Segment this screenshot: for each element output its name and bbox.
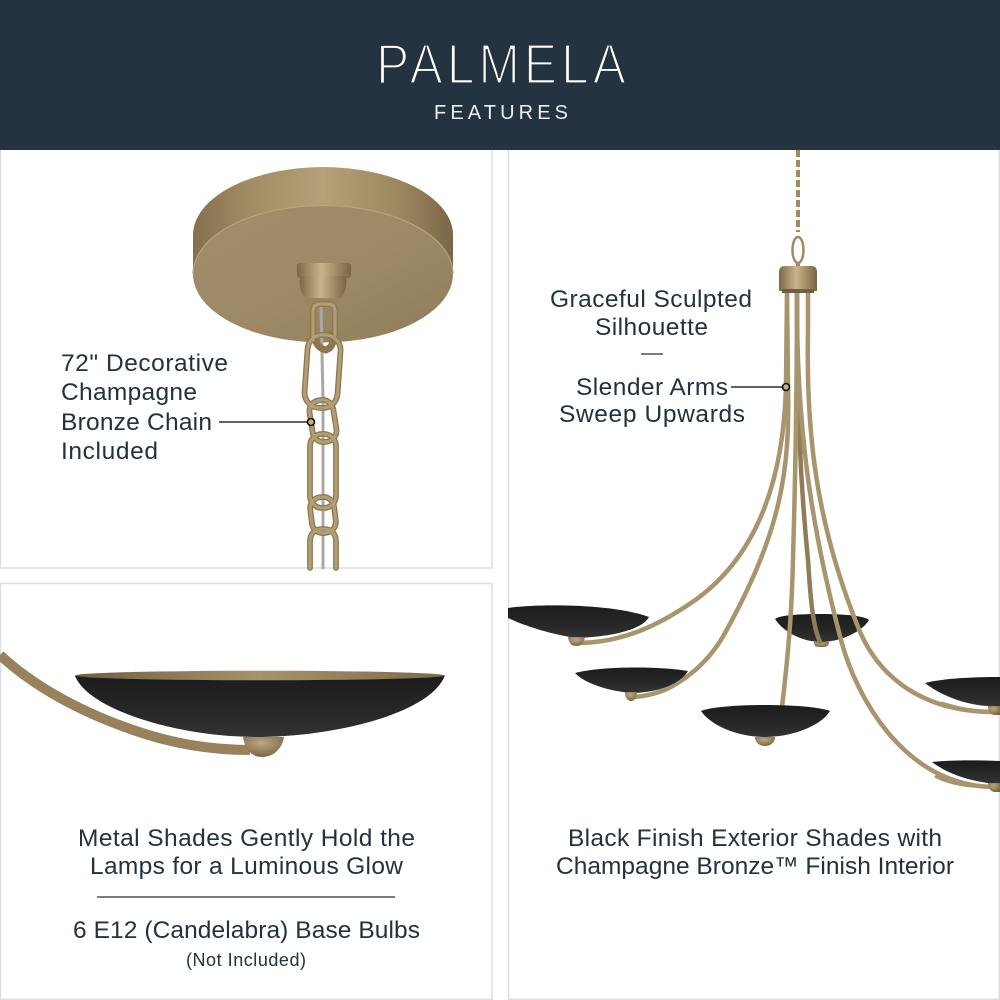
canopy <box>193 167 453 342</box>
callout: silhouette and arms: Silhouette <box>595 314 708 341</box>
callout: chain <box>61 350 314 465</box>
header band <box>0 0 1000 150</box>
shade right lower <box>932 760 1000 792</box>
ceiling cap <box>779 266 817 293</box>
back shade <box>775 614 869 647</box>
shade text: 6 E12 (Candelabra) Base Bulbs <box>73 917 420 944</box>
callout: chain: Bronze Chain <box>61 409 212 436</box>
shade text: (Not Included) <box>186 950 306 970</box>
callout: chain: Champagne <box>61 379 197 406</box>
finish text: Black Finish Exterior Shades with <box>568 825 942 852</box>
arm <box>0 655 250 750</box>
panel: chain detail <box>0 150 492 568</box>
finish text: Champagne Bronze™ Finish Interior <box>556 853 954 880</box>
callout: silhouette and arms: Graceful Sculpted <box>550 286 752 313</box>
callout: chain: 72" Decorative <box>61 350 228 377</box>
shade left <box>508 605 649 646</box>
shade text: Metal Shades Gently Hold the <box>78 825 415 852</box>
callout: silhouette and arms <box>550 286 790 428</box>
hanging chain <box>792 150 804 268</box>
panel: full chandelier <box>508 150 1000 999</box>
shade mid-left <box>575 667 692 701</box>
arms <box>580 292 995 787</box>
callout: chain: Included <box>61 438 158 465</box>
shade text: Lamps for a Luminous Glow <box>90 853 403 880</box>
shade text <box>73 825 420 970</box>
shade front <box>701 705 830 746</box>
large shade <box>75 671 445 757</box>
finish text <box>556 825 954 880</box>
callout: silhouette and arms: Sweep Upwards <box>559 401 745 428</box>
shade right upper <box>925 677 1000 715</box>
title: PALMELA <box>376 33 626 96</box>
callout: silhouette and arms: Slender Arms <box>576 374 728 401</box>
panel: shade detail <box>0 584 492 999</box>
subtitle: FEATURES <box>434 102 568 124</box>
chain <box>304 304 342 568</box>
